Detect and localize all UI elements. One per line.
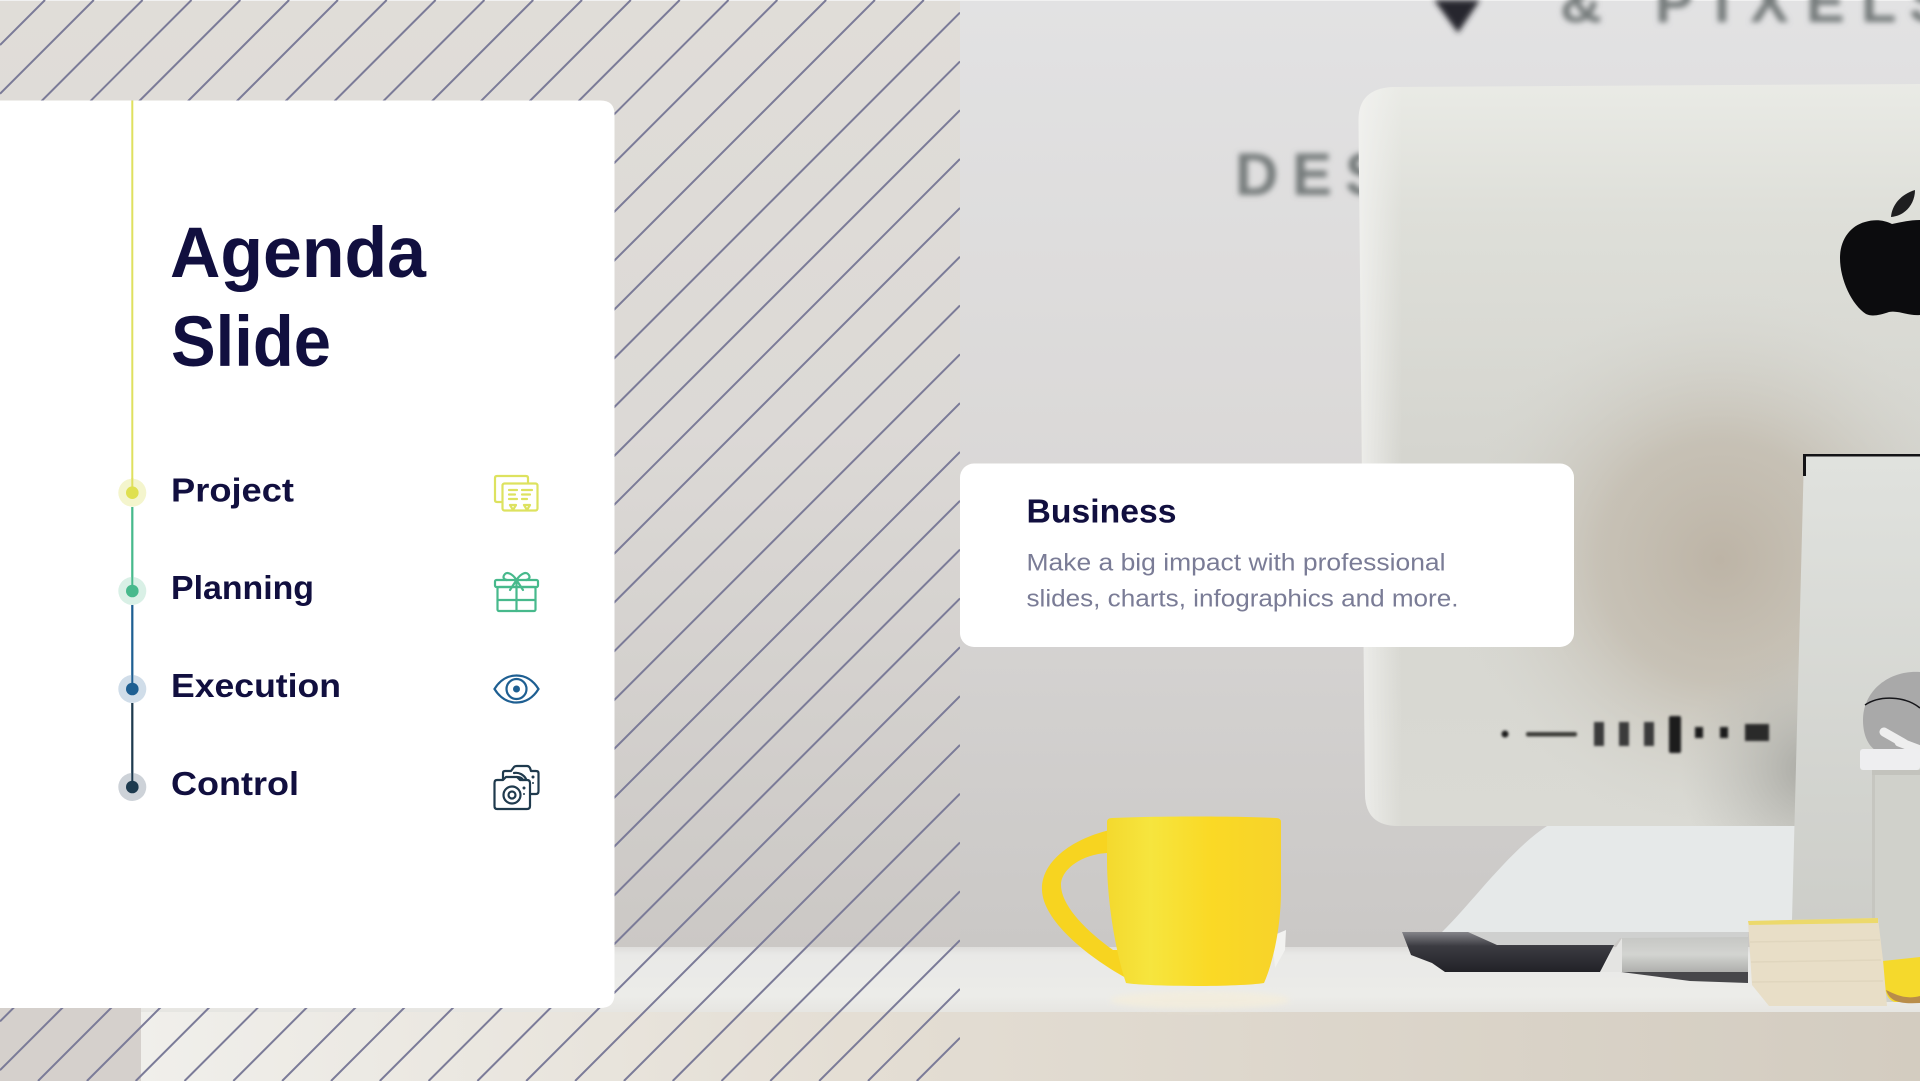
agenda item: Planning: Planning (171, 569, 314, 606)
icon: eye (494, 676, 538, 702)
icon: presentation cards (495, 476, 538, 510)
apple logo (1840, 190, 1920, 315)
blurred wall lettering: DES (1235, 141, 1385, 208)
clear cup with lid (1860, 749, 1920, 1003)
agenda item: Project: Project (171, 472, 294, 509)
keyboard and silver device (1402, 932, 1748, 983)
callout heading: Business (1026, 494, 1176, 531)
agenda item: Control: Control (171, 765, 299, 802)
diagonal stripe pattern (0, 0, 960, 1081)
disk and pen behind cup (1863, 672, 1920, 750)
monitor body (1350, 80, 1920, 840)
panel: agenda card (0, 100, 614, 1008)
agenda item: Execution: Execution (171, 667, 341, 704)
monitor ports (1502, 716, 1769, 753)
lower-left wall block (0, 1008, 141, 1081)
monitor base (1442, 826, 1800, 932)
icon: gift box (495, 573, 538, 611)
callout: business card (960, 464, 1574, 647)
timeline (118, 100, 146, 801)
monitor stand (1792, 454, 1920, 920)
icon: cameras (494, 766, 538, 809)
table surface (0, 947, 1920, 1013)
title: Slide (171, 303, 331, 382)
callout body text: slides, charts, infographics and more. (1026, 586, 1458, 613)
callout body text: Make a big impact with professional (1026, 550, 1446, 577)
wooden block (1748, 918, 1887, 1006)
yellow mug (1042, 816, 1286, 986)
blurred wall lettering (1235, 0, 1920, 208)
callout body text (1026, 550, 1458, 613)
title: Agenda (170, 214, 427, 293)
title (170, 214, 427, 382)
table front edge (141, 1012, 1920, 1081)
mug glow on table (1110, 991, 1290, 1009)
